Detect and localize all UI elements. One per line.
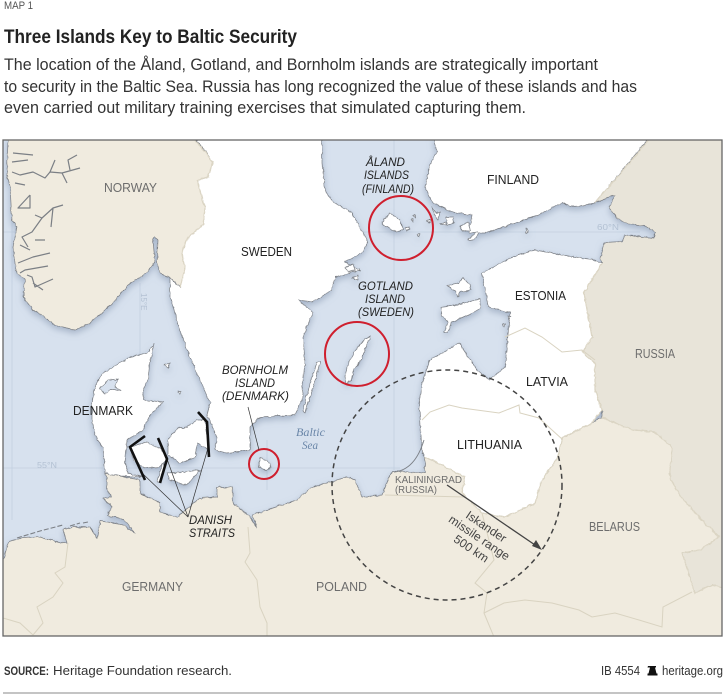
- red circle: Gotland: [325, 322, 389, 386]
- country labels: highlighted states: DENMARK: [73, 404, 134, 418]
- island labels: ISLANDS: [364, 168, 409, 182]
- island labels: STRAITS: [189, 526, 235, 540]
- danish straits markers: [130, 412, 209, 483]
- graticule labels: 55°N: [37, 460, 57, 470]
- island: Bornholm: [258, 458, 271, 470]
- island: Oland: [303, 362, 320, 413]
- intro text: The location of the Åland, Gotland, and Bornholm islands are strategically important: [4, 55, 598, 74]
- land: Germany, Poland, Belarus: [0, 417, 725, 640]
- country labels: other states: GERMANY: [122, 580, 184, 594]
- intro text: to security in the Baltic Sea. Russia has long recognized the value of these islands and has: [4, 77, 637, 96]
- estuary and coast details: [17, 440, 424, 538]
- land: Finland: [425, 138, 649, 233]
- country labels: highlighted states: LITHUANIA: [457, 438, 523, 452]
- land: Russia: [582, 138, 725, 593]
- footer rule: [3, 692, 722, 694]
- land: Denmark Jutland: [92, 344, 163, 477]
- map: [0, 138, 725, 640]
- label: Baltic Sea: [296, 428, 325, 449]
- island: Gotland: [345, 336, 371, 384]
- issue brief number: IB 4554: [601, 664, 640, 678]
- label: Iskander range: missile range: [446, 512, 513, 563]
- country labels: highlighted states: SWEDEN: [241, 245, 292, 259]
- country labels: other states: NORWAY: [104, 181, 158, 195]
- land: Funen: [130, 442, 167, 468]
- land: Baltic states: [419, 250, 602, 517]
- sea: [4, 140, 655, 558]
- land: Langeland: [157, 463, 165, 482]
- land borders: [180, 140, 725, 593]
- label: Kaliningrad: (RUSSIA): [395, 485, 437, 496]
- island labels: ÅLAND: [365, 154, 405, 169]
- island labels: ISLAND: [365, 292, 405, 306]
- island labels: ISLAND: [235, 376, 275, 390]
- land: Lolland and Falster: [167, 470, 200, 485]
- country labels: other states: BELARUS: [589, 520, 640, 534]
- small islands: [164, 207, 528, 394]
- graticule labels: 60°N: [597, 222, 619, 232]
- label: Baltic Sea: Baltic: [296, 425, 326, 439]
- norway fjords: [12, 153, 80, 290]
- island: Aland: [382, 213, 403, 232]
- map label: MAP 1: [4, 0, 33, 12]
- label: Iskander range: 500 km: [451, 532, 491, 565]
- island labels: DANISH: [189, 513, 232, 527]
- country borders: [3, 328, 692, 637]
- source: Heritage Foundation research.: [53, 663, 232, 678]
- island: Saaremaa: [441, 299, 480, 333]
- country labels: other states: [104, 181, 676, 594]
- country labels: highlighted states: LATVIA: [526, 375, 569, 389]
- title: Three Islands Key to Baltic Security: [4, 27, 297, 48]
- red circle: Aland: [369, 196, 433, 260]
- country labels: highlighted states: [73, 173, 569, 452]
- land: Sweden: [170, 138, 368, 453]
- Limfjord: [100, 379, 121, 394]
- map frame: [3, 140, 722, 636]
- intro text: [4, 55, 637, 117]
- land: Zealand: [168, 420, 208, 463]
- island labels: [189, 154, 414, 540]
- label: Kaliningrad: KALININGRAD: [395, 475, 462, 486]
- country labels: highlighted states: FINLAND: [487, 173, 539, 187]
- graticule labels: 15°E: [139, 293, 148, 310]
- island labels: (FINLAND): [362, 182, 414, 196]
- island: Hiiumaa: [447, 278, 471, 297]
- missile range arrow: [447, 485, 542, 550]
- country labels: other states: POLAND: [316, 580, 367, 594]
- icon: liberty bell: [648, 666, 658, 676]
- island labels: BORNHOLM: [222, 363, 288, 377]
- land: Norway: [7, 138, 213, 330]
- country labels: other states: RUSSIA: [635, 347, 676, 361]
- country labels: highlighted states: ESTONIA: [515, 289, 567, 303]
- danish straits leader lines: [143, 407, 259, 517]
- label: Baltic Sea: Sea: [302, 438, 318, 452]
- label: Kaliningrad: [396, 476, 462, 495]
- source: SOURCE:: [4, 664, 49, 678]
- red circle: Bornholm: [249, 449, 279, 479]
- island labels: (DENMARK): [222, 389, 289, 403]
- island labels: (SWEDEN): [358, 305, 414, 319]
- graticule labels: [37, 222, 619, 470]
- island labels: GOTLAND: [358, 279, 413, 293]
- label: Iskander range: Iskander: [463, 508, 509, 545]
- intro text: even carried out military training exercises that simulated capturing them.: [4, 98, 526, 117]
- land masses: [0, 138, 725, 640]
- missile range circle: [332, 370, 562, 600]
